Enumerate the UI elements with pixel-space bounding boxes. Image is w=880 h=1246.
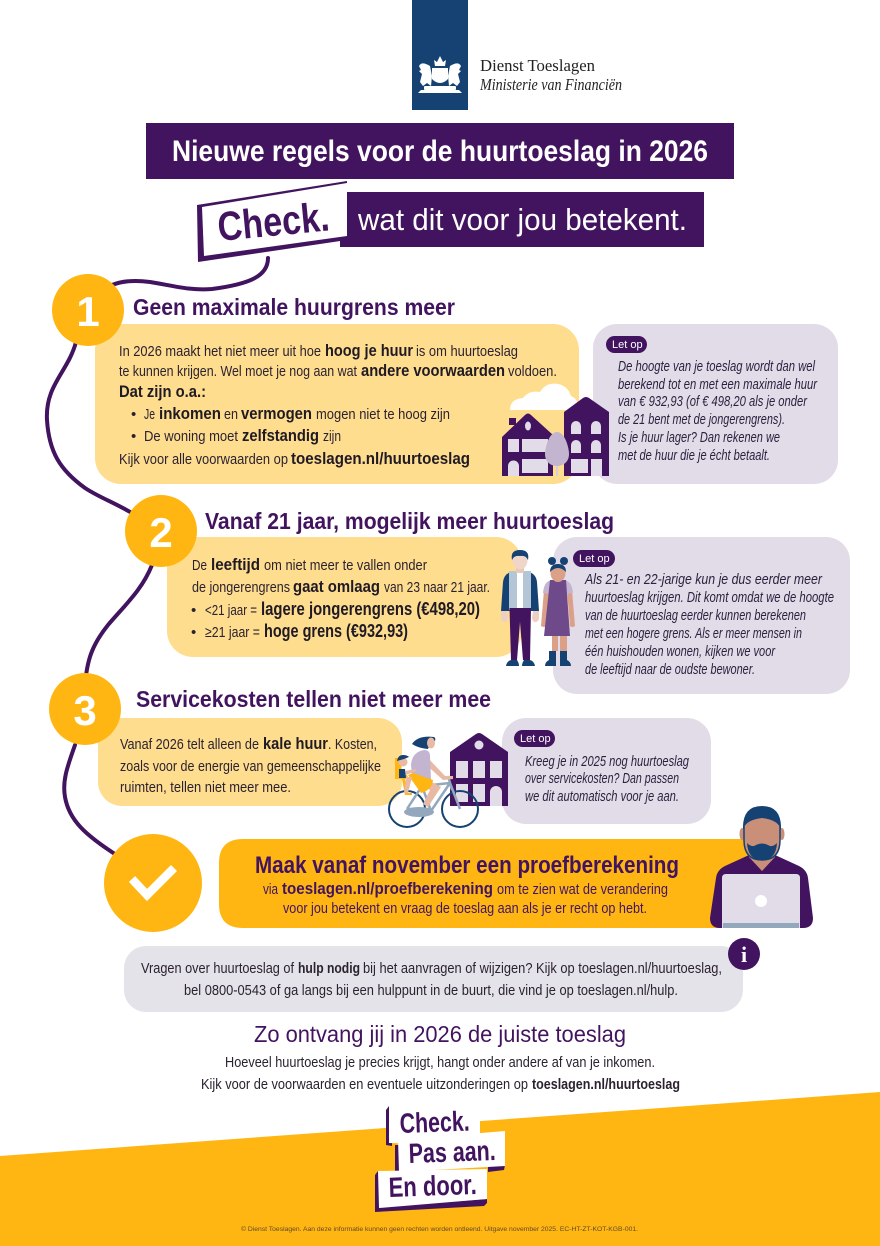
section 1 text: In 2026 maakt het niet meer uit hoe bbox=[119, 343, 321, 360]
section 1 text: te kunnen krijgen. Wel moet je nog aan wat bbox=[119, 363, 358, 380]
section 2 text: gaat omlaag bbox=[293, 577, 380, 596]
section 3 panel bbox=[98, 718, 402, 806]
help text: bel 0800-0543 of ga langs bij een hulppunt in de buurt, die vind je op toeslagen.nl/hulp. bbox=[184, 983, 678, 999]
icon: houses and tree bbox=[502, 397, 609, 476]
closing text bbox=[201, 1055, 680, 1093]
closing heading: Zo ontvang jij in 2026 de juiste toeslag bbox=[254, 1021, 626, 1047]
icon: girl bbox=[541, 557, 575, 666]
section 1 text: De woning moet bbox=[144, 428, 239, 445]
section 2 heading: Vanaf 21 jaar, mogelijk meer huurtoeslag bbox=[205, 508, 614, 534]
section 2 badge bbox=[125, 495, 197, 567]
icon: house bbox=[450, 733, 508, 806]
section 3 text: Vanaf 2026 telt alleen de bbox=[120, 736, 259, 753]
section 1 text: Kijk voor alle voorwaarden op bbox=[119, 451, 288, 468]
subtitle banner: wat dit voor jou betekent. bbox=[357, 202, 687, 237]
section 3 badge bbox=[49, 673, 121, 745]
help text bbox=[141, 961, 722, 999]
title banner: Nieuwe regels voor de huurtoeslag in 2026 bbox=[172, 135, 708, 168]
section 1 text: voldoen. bbox=[508, 363, 557, 380]
section 2 text: • bbox=[191, 624, 196, 641]
section 1 text: zelfstandig bbox=[242, 426, 319, 445]
section 3 heading: Servicekosten tellen niet meer mee bbox=[136, 686, 491, 712]
title banner bbox=[146, 123, 734, 179]
let op text: met de huur die je écht betaalt. bbox=[618, 447, 770, 464]
icon: royal crest bbox=[418, 56, 462, 93]
let op text: de leeftijd naar de oudste bewoner. bbox=[585, 661, 755, 678]
section 1 text: is om huurtoeslag bbox=[416, 343, 518, 360]
let op text: Kreeg je in 2025 nog huurtoeslag bbox=[525, 753, 689, 770]
call to action text bbox=[263, 880, 668, 917]
closing text: toeslagen.nl/huurtoeslag bbox=[532, 1077, 680, 1093]
let op text bbox=[584, 571, 834, 678]
logo text bbox=[479, 56, 622, 94]
section 1 text: inkomen bbox=[159, 404, 221, 423]
slogan stickers bbox=[375, 1105, 505, 1212]
section 2 text: hoge grens (€932,93) bbox=[264, 621, 408, 641]
check badge bbox=[104, 834, 202, 932]
section 1 badge: 1 bbox=[76, 288, 100, 335]
call to action text: om te zien wat de verandering bbox=[497, 882, 668, 898]
logo: blue ribbon bbox=[412, 0, 468, 110]
icon: man with laptop bbox=[710, 806, 813, 928]
call to action text: voor jou betekent en vraag de toeslag aan als je er recht op hebt. bbox=[283, 901, 647, 917]
slogan stickers: Pas aan. bbox=[408, 1135, 496, 1169]
call to action heading: Maak vanaf november een proefberekening bbox=[255, 852, 679, 879]
let op text: over servicekosten? Dan passen bbox=[525, 770, 679, 787]
subtitle banner bbox=[340, 192, 704, 247]
let op text: De hoogte van je toeslag wordt dan wel bbox=[618, 358, 815, 375]
section 3 text: kale huur bbox=[263, 734, 328, 753]
section 2 badge: 2 bbox=[149, 509, 173, 556]
section 1 text: mogen niet te hoog zijn bbox=[316, 406, 450, 423]
let op text: berekend tot en met een maximale huur bbox=[618, 376, 818, 393]
check sticker: Check. bbox=[215, 193, 331, 250]
section 1 heading: Geen maximale huurgrens meer bbox=[133, 294, 455, 320]
logo bbox=[412, 0, 622, 110]
logo text: Ministerie van Financiën bbox=[479, 75, 622, 94]
section 3 text bbox=[120, 734, 381, 796]
let op text: we dit automatisch voor je aan. bbox=[525, 788, 679, 805]
let op text: de 21 bent met de jongerengrens). bbox=[618, 411, 785, 428]
icon: info bbox=[728, 938, 760, 970]
section 1 text: andere voorwaarden bbox=[361, 361, 505, 380]
let op pill bbox=[573, 550, 615, 567]
bottom orange band bbox=[0, 1092, 880, 1246]
section 3 bbox=[49, 673, 711, 827]
section 3 text: ruimten, tellen niet meer mee. bbox=[120, 779, 291, 796]
let op text: Is je huur lager? Dan rekenen we bbox=[618, 429, 780, 446]
section 2 text: De bbox=[192, 557, 207, 574]
section 2 text: <21 jaar = bbox=[205, 602, 257, 619]
section 1 text: • bbox=[131, 428, 136, 445]
panel: help information bbox=[124, 938, 760, 1012]
help text: bij het aanvragen of wijzigen? Kijk op toeslagen.nl/huurtoeslag, bbox=[363, 961, 722, 977]
icon: info: i bbox=[741, 942, 747, 967]
let op text: van de huurtoeslag eerder kunnen berekenen bbox=[585, 607, 806, 624]
section 1 text: vermogen bbox=[241, 404, 312, 423]
let op text: één huishouden wonen, kijken we voor bbox=[585, 643, 776, 660]
closing text: Hoeveel huurtoeslag je precies krijgt, hangt onder andere af van je inkomen. bbox=[225, 1055, 655, 1071]
section 3 badge: 3 bbox=[73, 687, 97, 734]
icon: boy bbox=[501, 550, 539, 666]
let op pill bbox=[606, 336, 647, 353]
section 2 text bbox=[191, 555, 490, 641]
section 1 text: toeslagen.nl/huurtoeslag bbox=[291, 449, 470, 468]
section 1 text: • bbox=[131, 406, 136, 423]
panel: let op 2 bbox=[553, 537, 850, 694]
copyright: © Dienst Toeslagen. Aan deze informatie kunnen geen rechten worden ontleend. Uitgave november 2025. EC-HT-ZT-KOT-KGB-001. bbox=[241, 1225, 638, 1233]
logo text: Dienst Toeslagen bbox=[480, 56, 595, 75]
let op pill: Let op bbox=[579, 553, 610, 565]
section 2 text: leeftijd bbox=[211, 555, 260, 574]
let op text: Als 21- en 22-jarige kun je dus eerder meer bbox=[584, 571, 823, 588]
section 1 bbox=[52, 274, 838, 484]
let op text bbox=[525, 753, 689, 805]
section 2 text: lagere jongerengrens (€498,20) bbox=[261, 599, 480, 619]
closing text: Kijk voor de voorwaarden en eventuele uitzonderingen op bbox=[201, 1077, 528, 1093]
panel: let op 3 bbox=[502, 718, 711, 824]
icon: cyclist with child bbox=[389, 737, 478, 827]
call to action text: toeslagen.nl/proefberekening bbox=[282, 880, 493, 898]
connecting line bbox=[47, 258, 268, 856]
section 1 text: Je bbox=[144, 406, 155, 423]
let op pill: Let op bbox=[612, 339, 643, 351]
call to action text: via bbox=[263, 882, 279, 898]
section 2 text: om niet meer te vallen onder bbox=[264, 557, 427, 574]
section 1 text bbox=[119, 341, 557, 468]
section 2 bbox=[125, 495, 850, 694]
section 3 text: . Kosten, bbox=[328, 736, 377, 753]
section 1 panel bbox=[95, 324, 579, 484]
panel: let op 1 bbox=[593, 324, 838, 484]
section 3 text: zoals voor de energie van gemeenschappelijke bbox=[120, 758, 381, 775]
help text: Vragen over huurtoeslag of bbox=[141, 961, 295, 977]
slogan stickers: Check. bbox=[399, 1106, 470, 1139]
help text: hulp nodig bbox=[298, 961, 360, 977]
let op pill: Let op bbox=[520, 733, 551, 745]
section 2 text: de jongerengrens bbox=[192, 579, 290, 596]
panel: call to action bbox=[104, 834, 748, 932]
section 2 panel bbox=[167, 537, 522, 657]
let op text: van € 932,93 (of € 498,20 als je onder bbox=[618, 393, 808, 410]
let op text bbox=[618, 358, 818, 464]
section 1 text: en bbox=[224, 406, 238, 423]
check sticker bbox=[197, 181, 347, 262]
section 1 badge bbox=[52, 274, 124, 346]
slogan stickers: En door. bbox=[388, 1169, 477, 1203]
section 1 text: zijn bbox=[323, 428, 341, 445]
section 1 text: hoog je huur bbox=[325, 341, 413, 360]
let op pill bbox=[514, 730, 555, 747]
section 2 text: van 23 naar 21 jaar. bbox=[384, 579, 490, 596]
icon: cloud bbox=[510, 384, 578, 410]
section 1 text: Dat zijn o.a.: bbox=[119, 382, 206, 401]
section 2 text: ≥21 jaar = bbox=[205, 624, 260, 641]
section 2 text: • bbox=[191, 602, 196, 619]
